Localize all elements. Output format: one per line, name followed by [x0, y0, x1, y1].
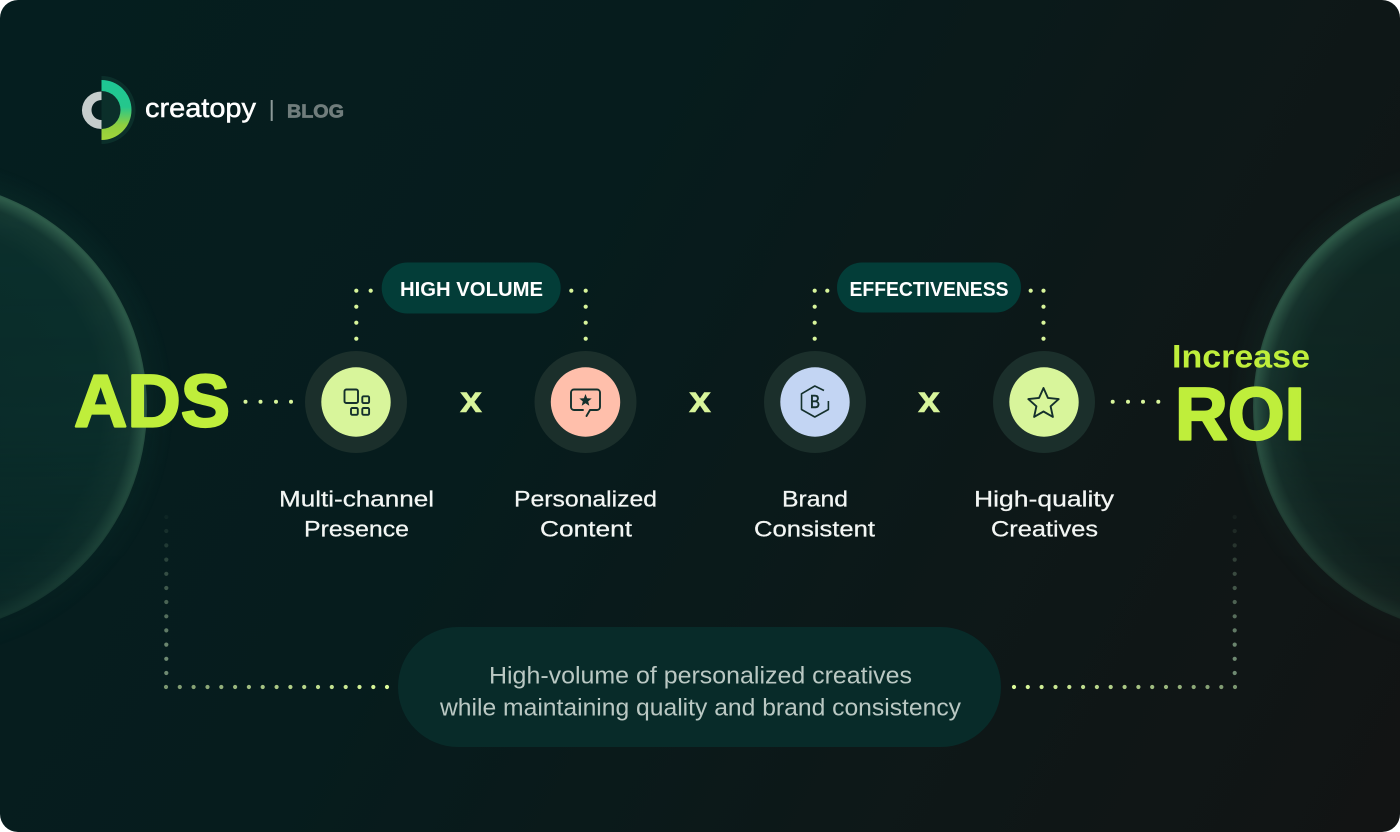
- icon: channel squares: [344, 390, 369, 415]
- label: personalized content: Content: [540, 516, 632, 542]
- label: multi-channel presence: Presence: [304, 516, 409, 542]
- pill: effectiveness: [837, 262, 1021, 312]
- connector dots: last step to ROI: [1111, 400, 1160, 404]
- step: multi-channel presence: [279, 351, 434, 542]
- increase ROI heading: Increase: [1172, 339, 1310, 375]
- label: personalized content: [514, 486, 657, 542]
- connector dots: effectiveness: [813, 289, 1046, 341]
- label: brand consistent: Consistent: [754, 516, 875, 542]
- icon: chat bubble with star: [571, 390, 600, 416]
- summary text: [439, 662, 961, 722]
- label: high-quality creatives: [974, 486, 1114, 542]
- logo wordmark: creatopy: [145, 93, 257, 123]
- step: high-quality creatives: [974, 351, 1114, 542]
- summary text: High-volume of personalized creatives: [489, 662, 912, 690]
- right sphere: [1253, 195, 1400, 619]
- pill: high volume: [382, 262, 561, 314]
- label: brand consistent: Brand: [782, 486, 848, 512]
- step: brand consistent: [754, 351, 875, 542]
- icon: star outline: [1028, 388, 1059, 417]
- increase ROI heading: ROI: [1175, 372, 1305, 456]
- label: multi-channel presence: Multi-channel: [279, 486, 434, 512]
- icon: hexagon brand badge: B: [810, 392, 820, 412]
- left sphere: [0, 195, 147, 618]
- summary text: while maintaining quality and brand consistency: [439, 694, 961, 722]
- connector dots: ADS to first step: [244, 400, 293, 404]
- logo: creatopy blog: [82, 76, 344, 144]
- step: personalized content: [514, 351, 657, 542]
- blog label: BLOG: [287, 100, 344, 121]
- multiply sign 1: x: [460, 379, 482, 420]
- label: high-quality creatives: High-quality: [974, 486, 1114, 512]
- pill: high volume: HIGH VOLUME: [400, 278, 543, 301]
- ADS heading: ADS: [74, 360, 230, 442]
- summary pill: [398, 627, 1001, 747]
- label: brand consistent: [754, 486, 875, 542]
- icon: hexagon brand badge: [802, 386, 828, 417]
- logo mark: [82, 76, 136, 144]
- label: multi-channel presence: [279, 486, 434, 542]
- multiply sign 2: x: [689, 379, 711, 420]
- connector dots: high volume: [354, 289, 588, 341]
- label: high-quality creatives: Creatives: [991, 516, 1098, 542]
- increase ROI heading: [1172, 339, 1310, 456]
- label: personalized content: Personalized: [514, 486, 657, 512]
- multiply sign 3: x: [918, 379, 940, 420]
- dotted line: left bracket: [164, 515, 389, 689]
- dotted line: right bracket: [1012, 515, 1237, 689]
- pill: effectiveness: EFFECTIVENESS: [850, 278, 1008, 301]
